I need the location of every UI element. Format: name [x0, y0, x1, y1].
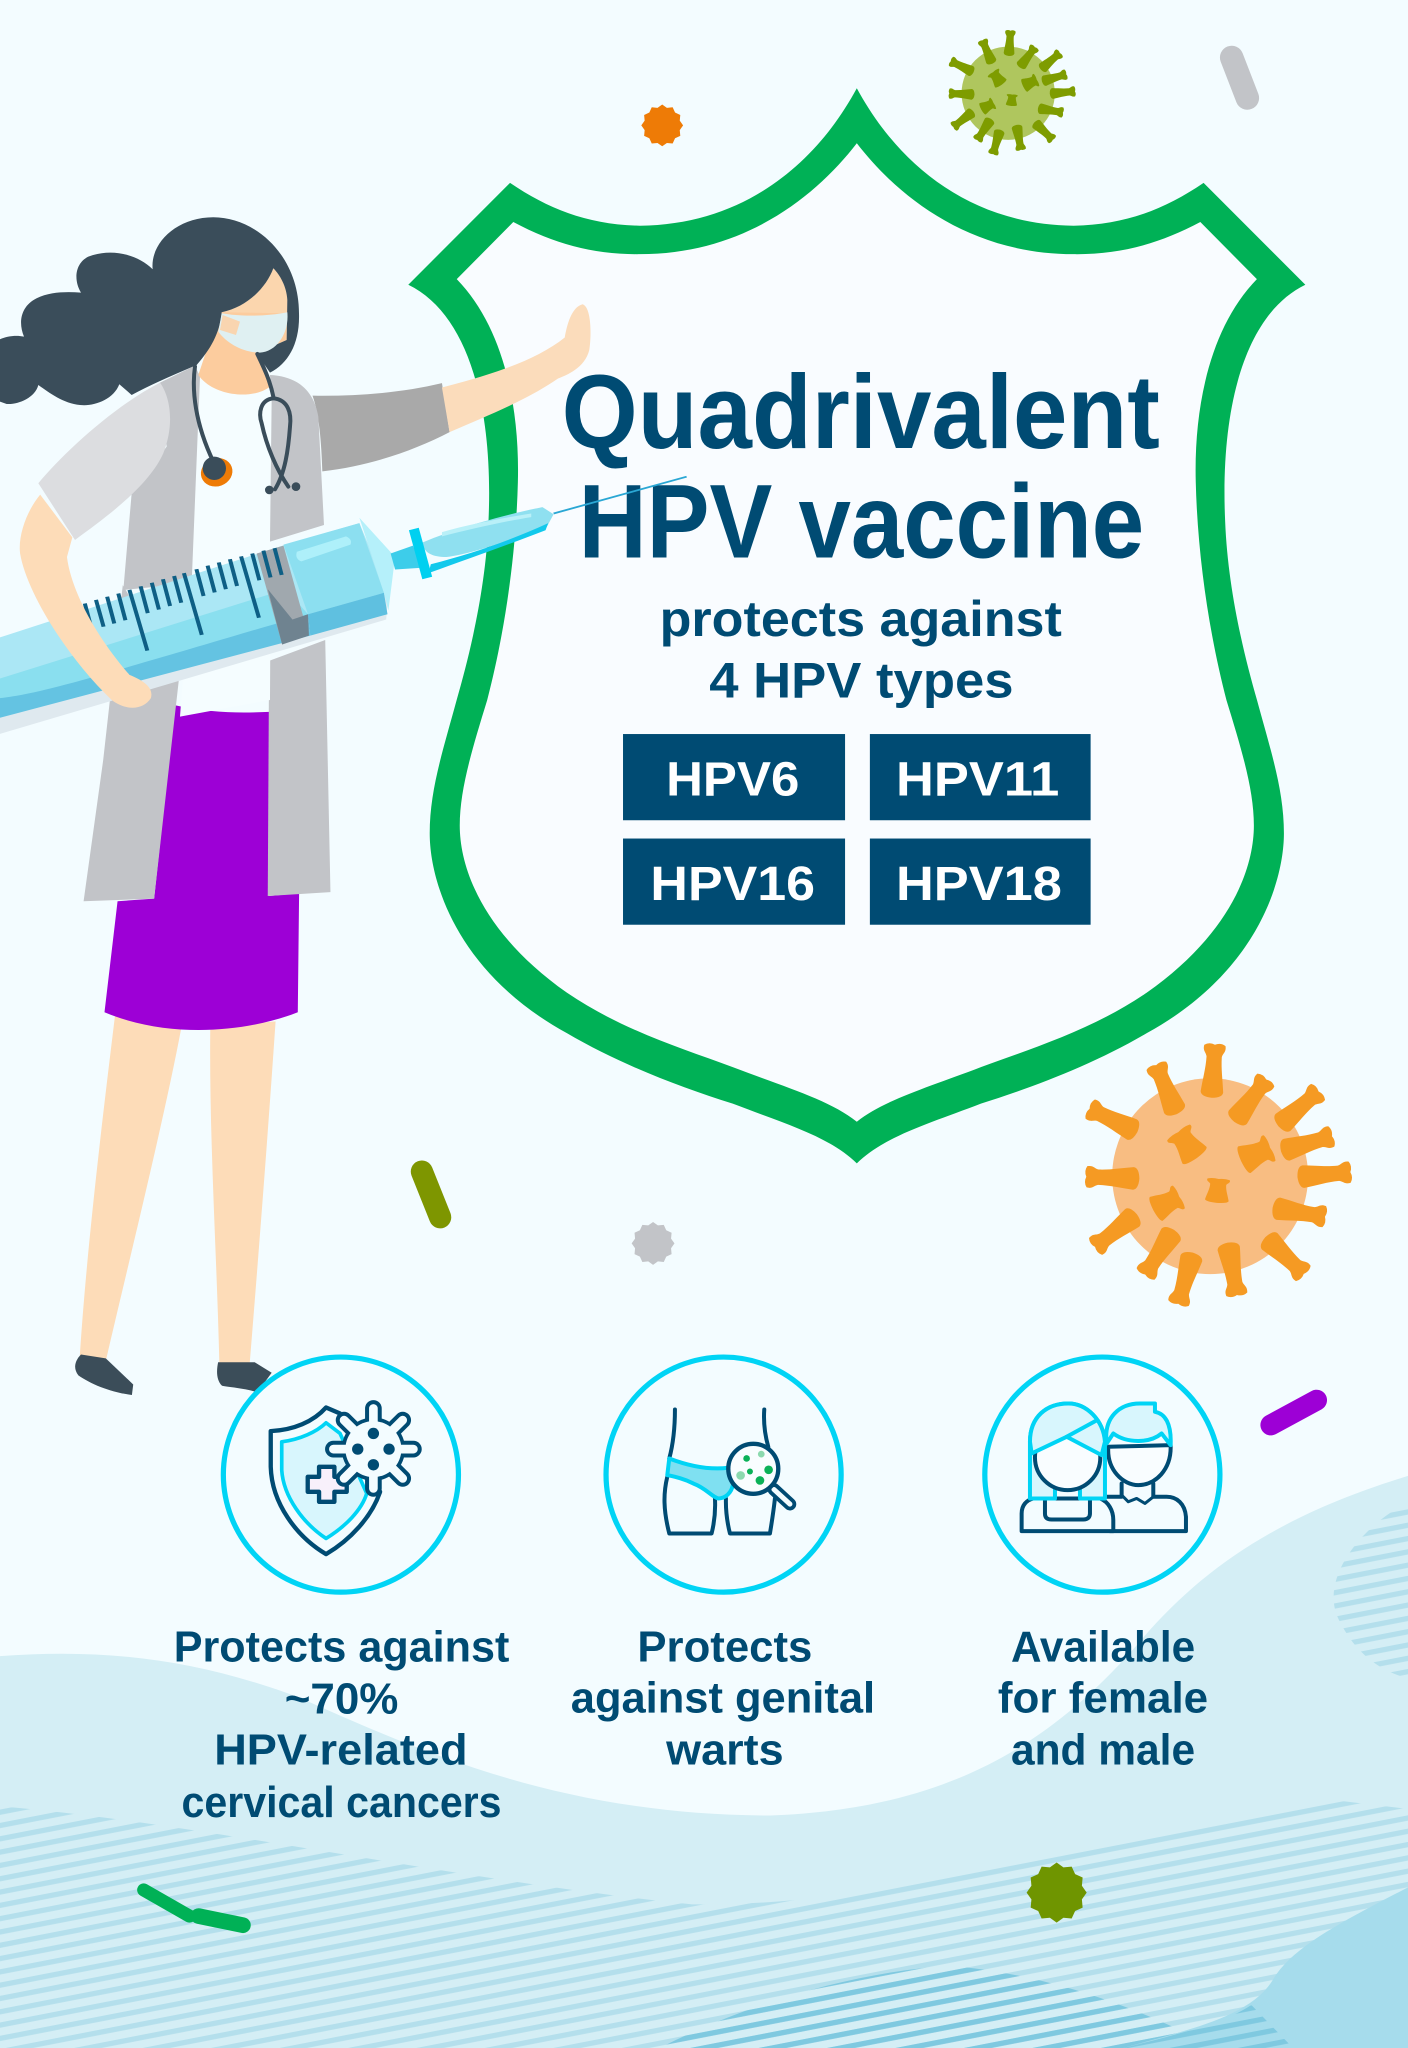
icon: big orange virus: [1084, 1043, 1353, 1308]
caption 1: [174, 1623, 509, 1827]
neck and face: [198, 268, 287, 395]
left sleeve: [38, 383, 170, 540]
caption 1: ~70%: [285, 1676, 398, 1724]
caption 2: warts: [665, 1727, 784, 1775]
skirt: [104, 705, 299, 1030]
right sleeve: [313, 383, 450, 471]
lab coat lower: [84, 585, 330, 901]
icon circle 3: [985, 1357, 1220, 1592]
caption 3: Available: [1011, 1623, 1195, 1671]
caption 3: and male: [1011, 1727, 1195, 1775]
legs: [80, 1016, 276, 1366]
syringe neck: [391, 546, 422, 570]
head and torso: [0, 217, 324, 717]
stethoscope chest piece: [197, 454, 300, 494]
icon: grey splat: [632, 1222, 674, 1265]
caption 2: against genital: [571, 1674, 875, 1722]
caption 1: cervical cancers: [182, 1779, 502, 1827]
icon: man and woman: [1022, 1403, 1186, 1531]
icon: legs and magnifier: [664, 1409, 790, 1533]
icon: grey capsule: [1232, 57, 1247, 98]
stethoscope: [194, 354, 290, 489]
lab coat right panel: [270, 375, 324, 542]
background corner blob stripes: [1123, 2005, 1293, 2048]
caption 3: for female: [998, 1674, 1208, 1722]
background wave: [0, 1476, 1408, 2048]
syringe: [0, 477, 687, 734]
box: HPV16: [623, 839, 845, 925]
title: HPV vaccine: [579, 464, 1144, 581]
box: HPV6: [623, 734, 845, 820]
icon: green virus: [948, 30, 1076, 156]
HPV type boxes: [623, 734, 1091, 925]
white shirt: [180, 375, 272, 717]
icon: orange splat: [641, 104, 683, 146]
forehead: [222, 268, 287, 313]
box: HPV6: HPV6: [666, 752, 799, 806]
syringe cone: [359, 518, 395, 611]
icon: purple capsule: [1271, 1400, 1317, 1425]
flange: [409, 528, 432, 579]
benefit 1: cervical cancers: [174, 1357, 509, 1827]
caption 2: Protects: [637, 1623, 812, 1671]
caption 2: [571, 1623, 875, 1775]
title: [562, 354, 1160, 581]
caption 1: HPV-related: [214, 1727, 468, 1775]
doctor figure with syringe: [0, 217, 687, 1395]
mask ear patch: [220, 315, 240, 335]
benefit 2: genital warts: [571, 1357, 875, 1775]
plunger stopper: [257, 546, 308, 645]
mask: [218, 312, 288, 353]
icon: green capsules: [144, 1890, 243, 1925]
lab coat left panel: [123, 366, 200, 590]
icon: olive capsule: [422, 1172, 440, 1217]
shield: [408, 88, 1305, 1163]
background dark stripes: [660, 1966, 1215, 2048]
box: HPV18: [870, 839, 1091, 925]
icon circle 2: [606, 1357, 841, 1592]
box: HPV18: HPV18: [896, 857, 1062, 911]
needle line: [554, 477, 687, 513]
hair: [0, 217, 299, 405]
title: Quadrivalent: [562, 354, 1160, 471]
raised arm: [442, 304, 591, 432]
caption 1: Protects against: [174, 1623, 509, 1671]
box: HPV16: HPV16: [650, 857, 815, 911]
subtitle: 4 HPV types: [709, 652, 1014, 708]
holding arm: [20, 495, 151, 708]
icon circle 1: [223, 1357, 458, 1592]
shield border: [408, 88, 1305, 1163]
box: HPV11: HPV11: [896, 752, 1059, 806]
background striped area lower: [0, 1800, 1408, 2048]
syringe barrel: [0, 523, 388, 714]
box: HPV11: [870, 734, 1091, 820]
icon: olive splat: [1027, 1863, 1087, 1923]
subtitle: protects against: [660, 591, 1062, 647]
caption 3: [998, 1623, 1208, 1775]
background striped area upper right: [1334, 1502, 1408, 1678]
syringe shadow: [0, 593, 388, 734]
shoes: [75, 1354, 272, 1395]
needle hub: [422, 507, 554, 557]
background corner blob: [1123, 1887, 1408, 2048]
benefit 3: female and male: [985, 1357, 1220, 1775]
icon: shield and virus: [271, 1407, 413, 1554]
scale ticks: [85, 548, 282, 651]
subtitle: [660, 591, 1062, 708]
